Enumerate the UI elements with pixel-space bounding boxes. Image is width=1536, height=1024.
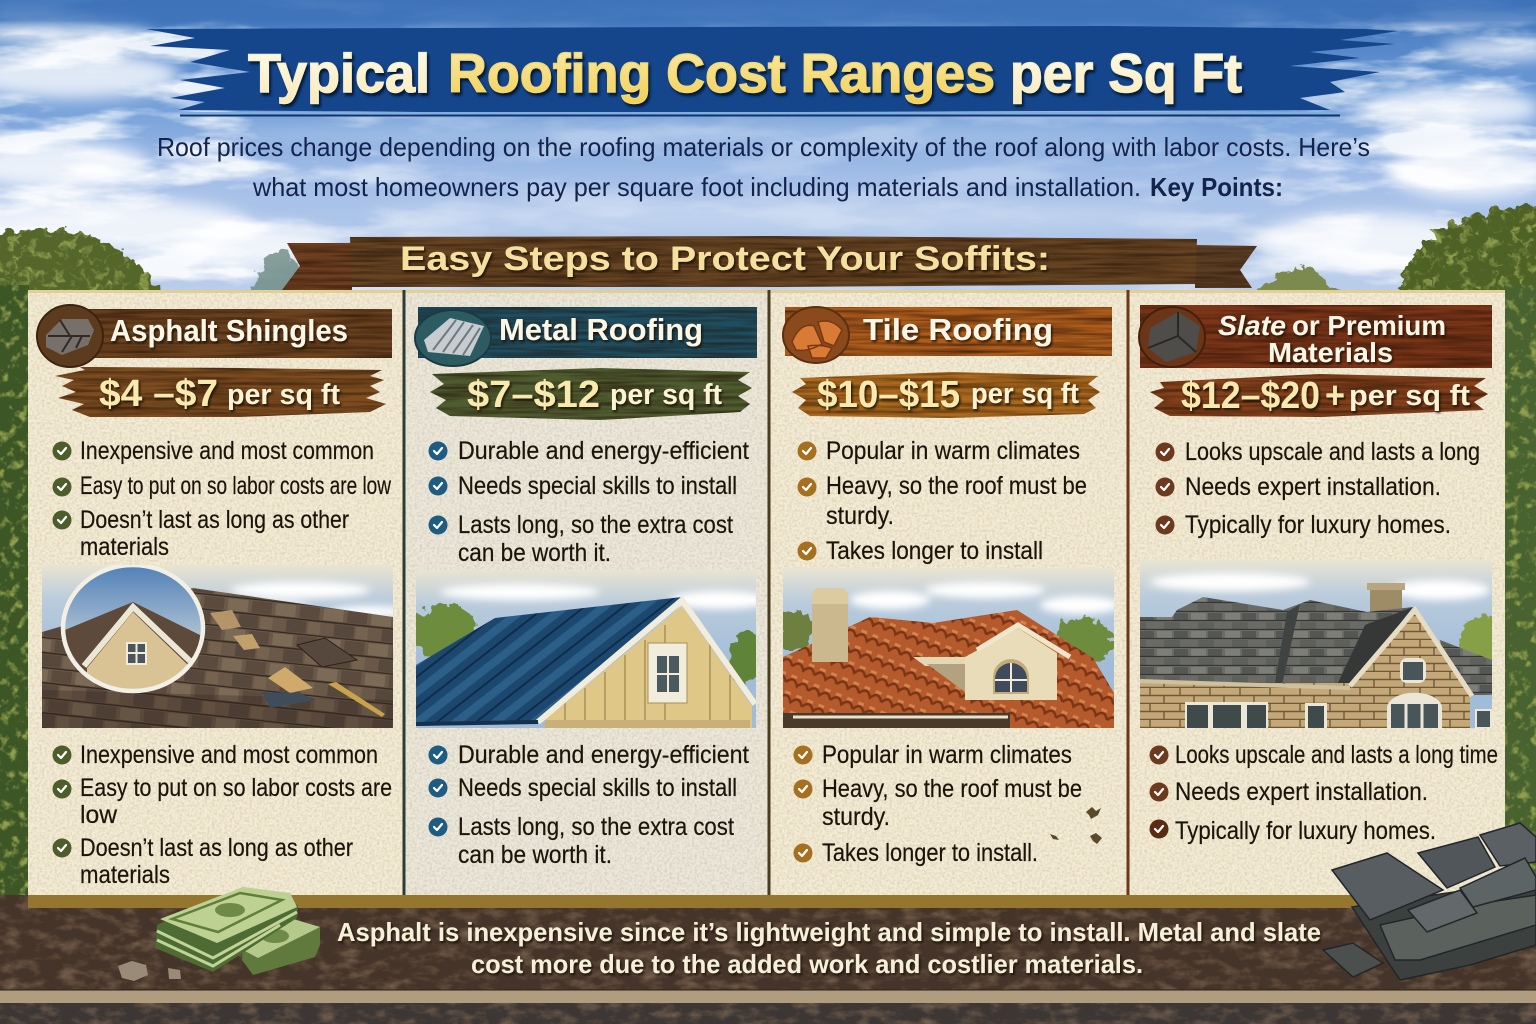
key points: asphalt lower	[52, 741, 392, 889]
image: slate roof stone house	[1140, 560, 1506, 728]
key points: metal lower	[428, 741, 749, 869]
header: slate: Slate	[1218, 310, 1286, 341]
icon: magnifier detail	[60, 565, 206, 694]
icon: stack of money	[118, 887, 320, 981]
header: metal roofing	[418, 307, 757, 358]
header: tile roofing	[785, 307, 1112, 356]
heading ribbon	[282, 236, 1257, 290]
key points: asphalt upper: Inexpensive and most common	[80, 437, 374, 465]
background: sky with clouds	[0, 0, 1536, 300]
header: tile roofing: Tile Roofing	[863, 312, 1053, 347]
price: slate	[1150, 374, 1488, 417]
price: tile roofing	[792, 372, 1100, 418]
key points: slate upper: Looks upscale and lasts a long	[1185, 438, 1480, 466]
key points: tile upper: Popular in warm climates	[826, 437, 1080, 465]
key points: tile lower: Popular in warm climates	[822, 741, 1072, 769]
image: metal roof house	[413, 570, 770, 728]
key points: metal lower: Lasts long, so the extra cost	[458, 813, 734, 841]
key points: slate upper: Typically for luxury homes.	[1185, 511, 1451, 539]
key points: slate upper	[1156, 438, 1480, 539]
title text: Typical	[248, 42, 430, 104]
key points: metal upper: Durable and energy-efficient	[458, 437, 749, 465]
key points: metal upper: Needs special skills to install	[458, 472, 737, 500]
callout: bottom summary: Asphalt is inexpensive since it’s lightweight and simple to install. Metal and slate	[337, 917, 1321, 947]
heading text: Easy Steps to Protect Your Soffits:	[400, 240, 1050, 278]
header: slate	[1140, 305, 1492, 368]
image: asphalt roof with magnifier	[42, 560, 410, 728]
key points: tile lower: Takes longer to install.	[822, 839, 1038, 867]
key points: metal lower: can be worth it.	[458, 841, 612, 869]
price: slate: per sq ft	[1349, 380, 1470, 412]
decoration: leaves	[1050, 807, 1102, 844]
key points: asphalt lower: Easy to put on so labor costs are	[80, 774, 392, 802]
key points: asphalt upper: Easy to put on so labor costs are low	[80, 472, 392, 500]
price: slate: +	[1325, 375, 1345, 417]
key points: metal lower: Durable and energy-efficient	[458, 741, 749, 769]
title text	[248, 42, 1242, 104]
image: tile roof house	[778, 568, 1120, 728]
price: asphalt shingles	[55, 367, 386, 417]
header: slate: or Premium	[1292, 310, 1446, 341]
icon: asphalt shingles	[37, 305, 103, 367]
price: slate: $12–$20	[1181, 375, 1320, 417]
key points: tile upper	[798, 437, 1087, 565]
price: metal roofing	[430, 368, 752, 420]
key points: metal upper	[428, 437, 749, 567]
header: metal roofing: Metal Roofing	[499, 312, 703, 347]
panel: cream board	[28, 290, 1505, 895]
price: asphalt shingles: per sq ft	[227, 379, 340, 411]
key points: tile upper: Takes longer to install	[826, 537, 1043, 565]
panel: metal roofing	[413, 307, 770, 869]
intro text	[157, 132, 1370, 202]
key points: tile upper: sturdy.	[826, 502, 894, 530]
header: asphalt shingles	[60, 309, 392, 358]
intro text: Roof prices change depending on the roofing materials or complexity of the roof along with labor costs. Here’s	[157, 132, 1370, 162]
key points: metal upper: can be worth it.	[458, 539, 611, 567]
key points: asphalt lower: Doesn’t last as long as other	[80, 834, 353, 862]
key points: metal lower: Needs special skills to install	[458, 774, 737, 802]
icon: pile of slate tiles	[1323, 823, 1536, 980]
key points: asphalt upper: materials	[80, 533, 169, 561]
icon: slate tile	[1139, 307, 1205, 367]
panel: slate or premium materials	[1139, 305, 1506, 845]
key points: slate lower: Needs expert installation.	[1175, 778, 1428, 806]
intro text: Key Points:	[1150, 172, 1283, 202]
key points: tile lower	[794, 741, 1082, 867]
bottom ground strip	[0, 895, 1536, 1024]
header: slate: Materials	[1268, 337, 1393, 368]
key points: slate upper: Needs expert installation.	[1185, 473, 1441, 501]
callout: bottom summary	[337, 917, 1321, 979]
icon: clay tiles	[783, 307, 849, 363]
key points: asphalt lower: materials	[80, 861, 170, 889]
key points: slate lower: Typically for luxury homes.	[1175, 817, 1436, 845]
title text: Roofing Cost Ranges	[448, 42, 995, 104]
key points: metal upper: Lasts long, so the extra cost	[458, 511, 733, 539]
price: tile roofing: $10–$15	[817, 374, 960, 416]
price: asphalt shingles: $4 –$7	[99, 373, 218, 415]
title text: per Sq Ft	[1010, 42, 1242, 104]
panel: asphalt shingles	[37, 305, 410, 889]
icon: metal panels	[415, 310, 491, 366]
key points: asphalt lower: Inexpensive and most common	[80, 741, 378, 769]
price: metal roofing: per sq ft	[610, 379, 722, 411]
callout: bottom summary: cost more due to the added work and costlier materials.	[471, 949, 1143, 979]
panel: tile roofing	[778, 307, 1120, 867]
header: asphalt shingles: Asphalt Shingles	[110, 313, 348, 348]
price: metal roofing: $7–$12	[467, 374, 600, 416]
key points: slate lower	[1150, 741, 1498, 845]
key points: tile upper: Heavy, so the roof must be	[826, 472, 1087, 500]
background: trees	[0, 205, 1536, 910]
title banner	[146, 26, 1398, 116]
price: tile roofing: per sq ft	[971, 378, 1079, 410]
key points: asphalt upper	[52, 437, 392, 561]
key points: asphalt lower: low	[80, 801, 118, 829]
key points: asphalt upper: Doesn’t last as long as other	[80, 506, 349, 534]
intro text: what most homeowners pay per square foot including materials and installation.	[252, 172, 1141, 202]
key points: tile lower: Heavy, so the roof must be	[822, 775, 1082, 803]
key points: tile lower: sturdy.	[822, 803, 890, 831]
